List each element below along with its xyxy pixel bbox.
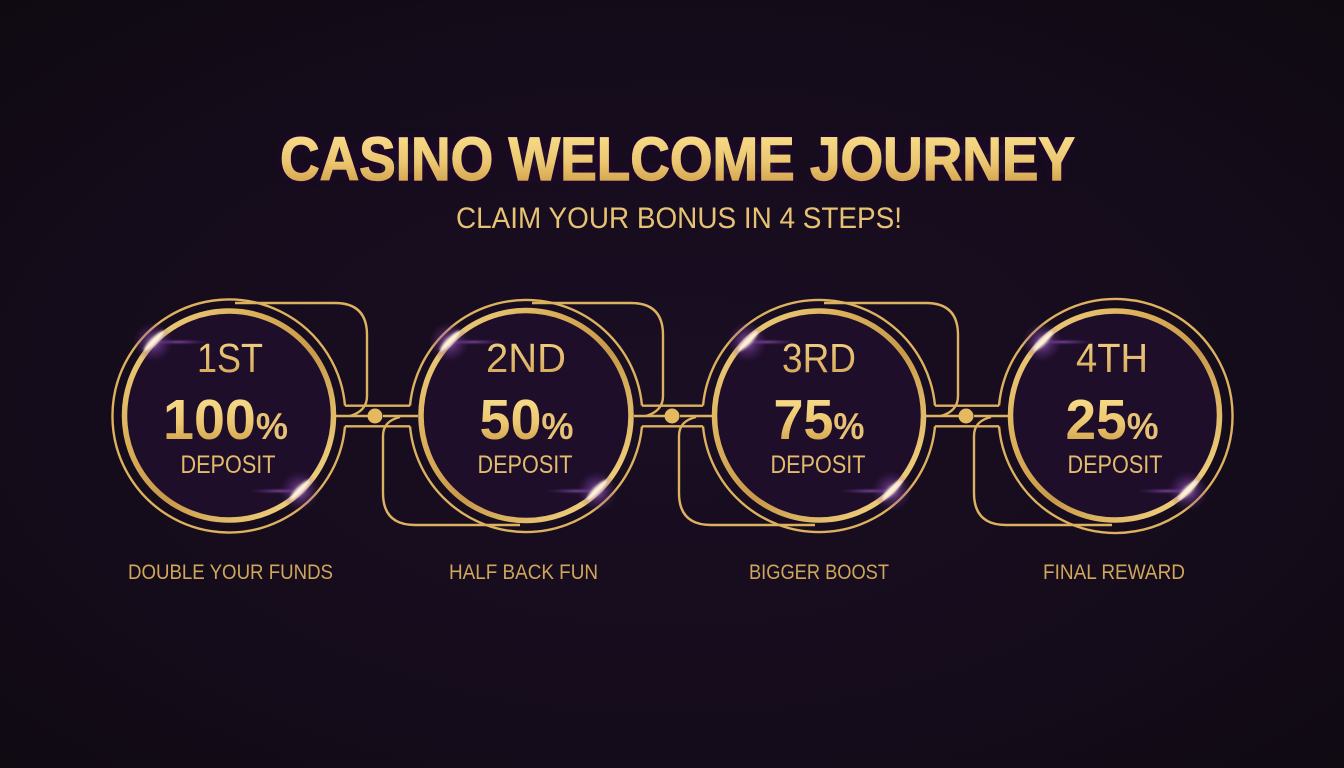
step 4 deposit label: DEPOSIT	[1068, 451, 1162, 479]
step 4 percentage: 25%	[1066, 388, 1158, 452]
step 1 deposit label: DEPOSIT	[180, 451, 276, 479]
caption: step 2: HALF BACK FUN	[449, 561, 598, 584]
step 2 ordinal: 2ND	[486, 335, 566, 381]
subtitle: CLAIM YOUR BONUS IN 4 STEPS!	[456, 202, 902, 235]
connector: step 3 to step 4	[824, 303, 1112, 525]
step 4 ordinal: 4TH	[1076, 335, 1148, 381]
step 1 percentage: 100%	[163, 388, 288, 452]
step 3 deposit label: DEPOSIT	[770, 451, 866, 479]
step 3 percentage: 75%	[774, 388, 864, 452]
caption: step 1: DOUBLE YOUR FUNDS	[128, 561, 333, 584]
step 4 badge	[999, 299, 1233, 533]
step 1 badge	[112, 299, 345, 532]
step 1 ordinal: 1ST	[197, 335, 263, 381]
caption: step 4: FINAL REWARD	[1043, 561, 1185, 584]
step 2 deposit label: DEPOSIT	[478, 451, 572, 479]
step 2 badge	[410, 300, 642, 532]
caption: step 3: BIGGER BOOST	[749, 561, 889, 584]
connector: step 2 to step 3	[532, 303, 815, 525]
step 3 ordinal: 3RD	[782, 335, 856, 381]
step 2 percentage: 50%	[480, 388, 574, 452]
connector: step 1 to step 2	[235, 303, 520, 525]
step 3 badge	[703, 300, 935, 532]
title: CASINO WELCOME JOURNEY	[280, 125, 1075, 193]
